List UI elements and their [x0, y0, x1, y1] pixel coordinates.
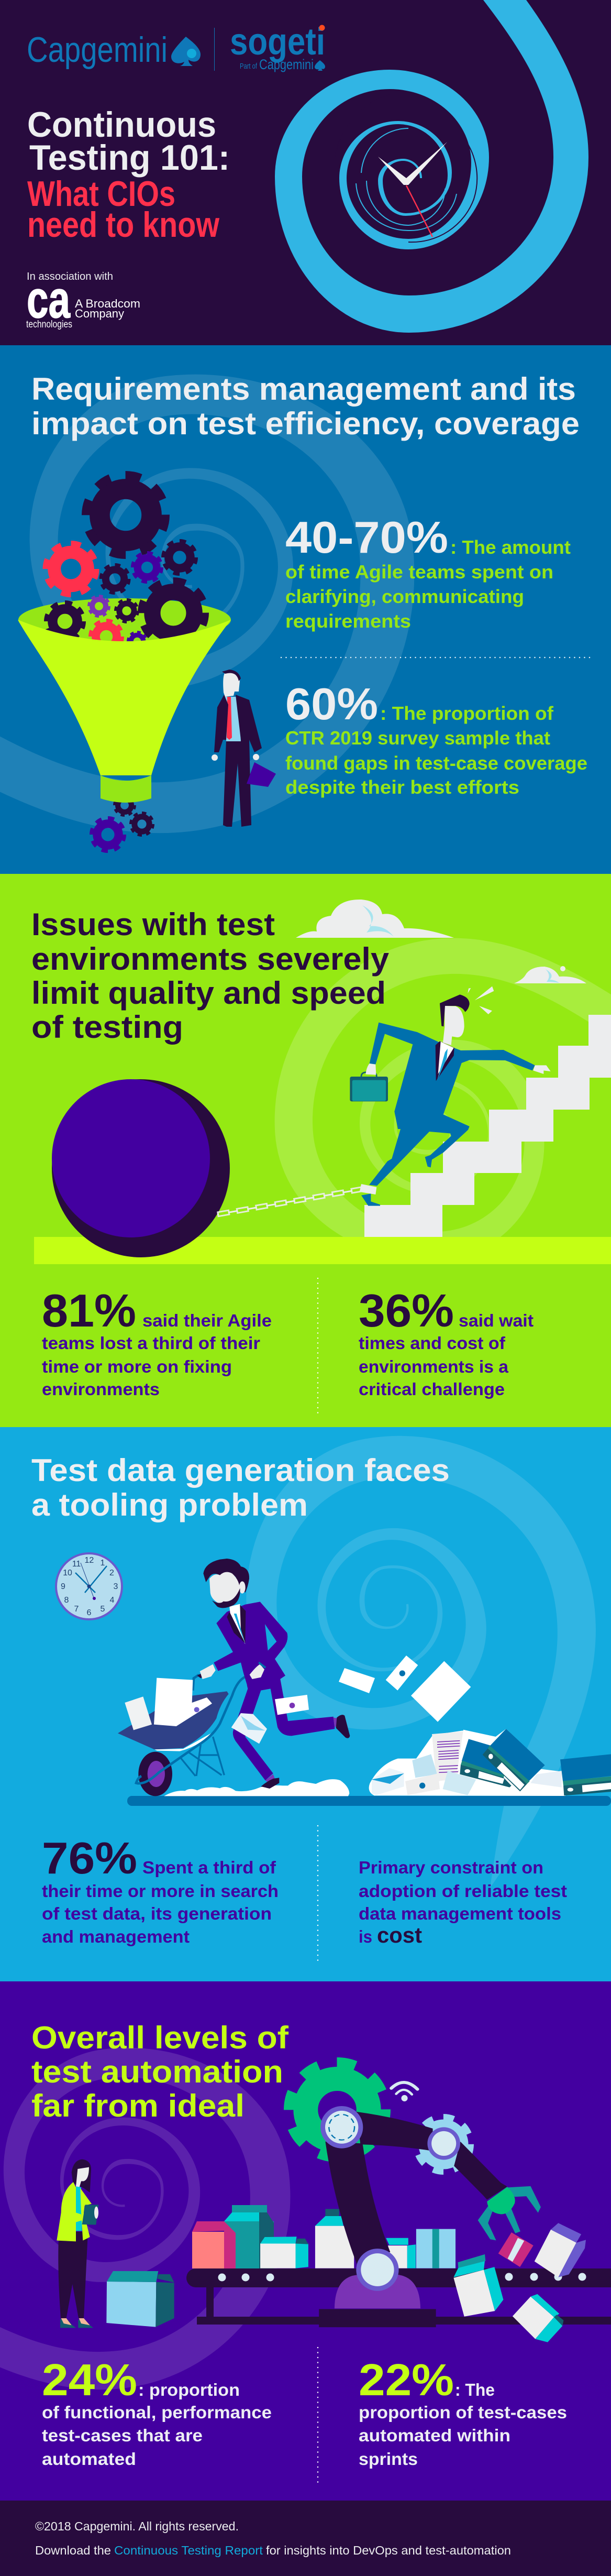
- heading: [31, 1453, 450, 1522]
- stat: 40-70%: 40-70%: [285, 513, 448, 563]
- wrecking ball: [52, 1079, 230, 1257]
- icon: wall clock: 4: [110, 1596, 115, 1605]
- heading: far from ideal: [31, 2088, 245, 2123]
- stat: primary constraint: is: [359, 1927, 372, 1946]
- stat: 22%: : The: [455, 2380, 495, 2399]
- stat: 60%: CTR 2019 survey sample that: [285, 727, 550, 749]
- stat: primary constraint: data management tools: [359, 1904, 561, 1923]
- stat: 40-70%: [285, 513, 571, 632]
- stat: 24%: of functional, performance: [42, 2403, 272, 2422]
- icon: wall clock: 1: [101, 1559, 105, 1567]
- illustration: man with wheelbarrow: [118, 1559, 350, 1796]
- conveyor: [186, 2268, 611, 2325]
- icon: CA Technologies logo: A Broadcom: [75, 297, 140, 310]
- heading: impact on test efficiency, coverage: [31, 406, 580, 441]
- title: [27, 105, 230, 245]
- heading: [31, 2020, 289, 2123]
- stat: 24%: [42, 2355, 272, 2469]
- stat: 60%: 60%: [285, 679, 378, 729]
- icon: wall clock: 6: [87, 1608, 92, 1617]
- icon: Sogeti logo: Part of: [240, 62, 258, 71]
- illustration: woman with tablet and box: [57, 2160, 174, 2328]
- stat: 22%: 22%: [359, 2355, 454, 2405]
- panel: requirements management: [0, 345, 611, 874]
- icon: wall clock: 5: [101, 1605, 105, 1614]
- stat: 76%: 76%: [42, 1834, 137, 1883]
- stat: 76%: Spent a third of: [142, 1858, 276, 1877]
- stat: 24%: test-cases that are: [42, 2426, 203, 2445]
- copyright: ©2018 Capgemini. All rights reserved.: [35, 2519, 239, 2533]
- stat: 60%: despite their best efforts: [285, 776, 519, 798]
- stat: 81%: teams lost a third of their: [42, 1333, 260, 1353]
- conveyor rollers: [218, 2273, 586, 2281]
- icon: CA Technologies logo: Company: [75, 307, 124, 320]
- heading: Issues with test: [31, 907, 275, 942]
- illustration: businessman looking up: [212, 670, 276, 827]
- stat: 36%: critical challenge: [359, 1379, 505, 1399]
- icon: wall clock: 10: [63, 1569, 72, 1577]
- icon: Capgemini logo: Capgemini: [27, 30, 168, 70]
- icon: wall clock: 2: [109, 1569, 114, 1577]
- chain: [217, 1189, 361, 1214]
- icon: large cloud: [296, 900, 454, 938]
- heading: a tooling problem: [31, 1487, 308, 1522]
- heading: Overall levels of: [31, 2020, 289, 2055]
- panel: footer: [0, 2501, 611, 2576]
- divider: [214, 28, 215, 71]
- spiral clock: [275, 0, 588, 333]
- robot arm and conveyor items: [260, 2082, 586, 2342]
- download line: Continuous Testing Report: [114, 2544, 263, 2557]
- heading: limit quality and speed: [31, 975, 386, 1011]
- icon: Sogeti logo: sogeti: [230, 21, 325, 63]
- stat: primary constraint: Primary constraint on: [359, 1858, 543, 1877]
- icon: CA Technologies logo: [26, 270, 140, 330]
- ground: [127, 1796, 611, 1806]
- download line: [35, 2544, 511, 2557]
- staircase: [364, 1015, 611, 1237]
- download line: for insights into DevOps and test-automation: [266, 2544, 511, 2557]
- panel: test environments: [0, 874, 611, 1427]
- stat: 81%: said their Agile: [142, 1311, 272, 1330]
- ground: [34, 1237, 611, 1264]
- stat: 36%: 36%: [359, 1285, 454, 1336]
- heading: environments severely: [31, 941, 390, 977]
- icon: wall clock: 11: [72, 1560, 81, 1569]
- floating envelope: [339, 1668, 375, 1693]
- title: need to know: [27, 205, 220, 245]
- heading: of testing: [31, 1010, 183, 1045]
- stat: 36%: said wait: [459, 1311, 534, 1330]
- stat: 24%: 24%: [42, 2355, 137, 2405]
- stat: 22%: automated within: [359, 2426, 510, 2445]
- text: In association with: In association with: [27, 271, 113, 282]
- title: Testing 101:: [29, 138, 230, 178]
- stat: primary constraint: cost: [377, 1923, 422, 1947]
- stat: 24%: : proportion: [138, 2380, 240, 2399]
- illustration: running businessman: [350, 986, 551, 1206]
- stat: 40-70%: requirements: [285, 610, 411, 632]
- stat: 81%: time or more on fixing: [42, 1357, 232, 1376]
- panel: header: [26, 0, 588, 333]
- stat: 81%: environments: [42, 1379, 160, 1399]
- stat: 36%: [359, 1285, 534, 1399]
- panel: test automation: [0, 1981, 611, 2501]
- panel: test data: [0, 1405, 611, 1981]
- stat: 81%: [42, 1285, 272, 1399]
- icon: wall clock: 9: [61, 1582, 65, 1591]
- stat: 60%: [285, 679, 587, 798]
- icon: light blue gear: [416, 2117, 471, 2172]
- icon: wall clock: 8: [64, 1596, 69, 1605]
- heading: test automation: [31, 2054, 283, 2089]
- icon: green gear: [289, 2063, 385, 2157]
- stat: 40-70%: of time Agile teams spent on: [285, 561, 553, 583]
- icon: CA Technologies logo: technologies: [26, 319, 72, 330]
- heading: [31, 907, 390, 1045]
- stat: 36%: times and cost of: [359, 1333, 506, 1353]
- title: Continuous: [27, 105, 216, 145]
- heading: Requirements management and its: [31, 371, 576, 407]
- stat: 76%: and management: [42, 1927, 190, 1946]
- title: What CIOs: [27, 174, 175, 214]
- stat: 24%: automated: [42, 2449, 136, 2469]
- stat: 76%: their time or more in search: [42, 1881, 279, 1901]
- stat: primary constraint: adoption of reliable test: [359, 1881, 567, 1901]
- icon: wall clock: [56, 1553, 122, 1619]
- stat: 81%: 81%: [42, 1285, 136, 1336]
- icon: CA Technologies logo: ca: [27, 270, 71, 329]
- download line: Download the: [35, 2544, 111, 2557]
- icon: wall clock: 12: [85, 1556, 94, 1565]
- stat: 76%: of test data, its generation: [42, 1904, 272, 1923]
- stat: 40-70%: : The amount: [450, 536, 571, 558]
- illustration: gears and funnel: [18, 475, 231, 851]
- stat: 60%: found gaps in test-case coverage: [285, 752, 587, 774]
- stat: 22%: sprints: [359, 2449, 418, 2469]
- heading: Test data generation faces: [31, 1453, 450, 1488]
- stat: 76%: [42, 1834, 279, 1946]
- stat: 60%: : The proportion of: [380, 703, 554, 724]
- stat: 36%: environments is a: [359, 1357, 509, 1376]
- stat: 40-70%: clarifying, communicating: [285, 586, 524, 607]
- icon: small cloud: [514, 966, 586, 983]
- icon: wall clock: 3: [114, 1582, 118, 1591]
- stat: 22%: proportion of test-cases: [359, 2403, 567, 2422]
- boxes on conveyor: [192, 2205, 274, 2268]
- paper pile: [369, 1656, 611, 1796]
- stat: primary constraint: [359, 1858, 567, 1947]
- icon: wall clock: 7: [74, 1605, 79, 1614]
- stat: 22%: [359, 2355, 567, 2469]
- icon: Sogeti logo: Capgemini: [259, 57, 314, 72]
- heading: [31, 371, 580, 441]
